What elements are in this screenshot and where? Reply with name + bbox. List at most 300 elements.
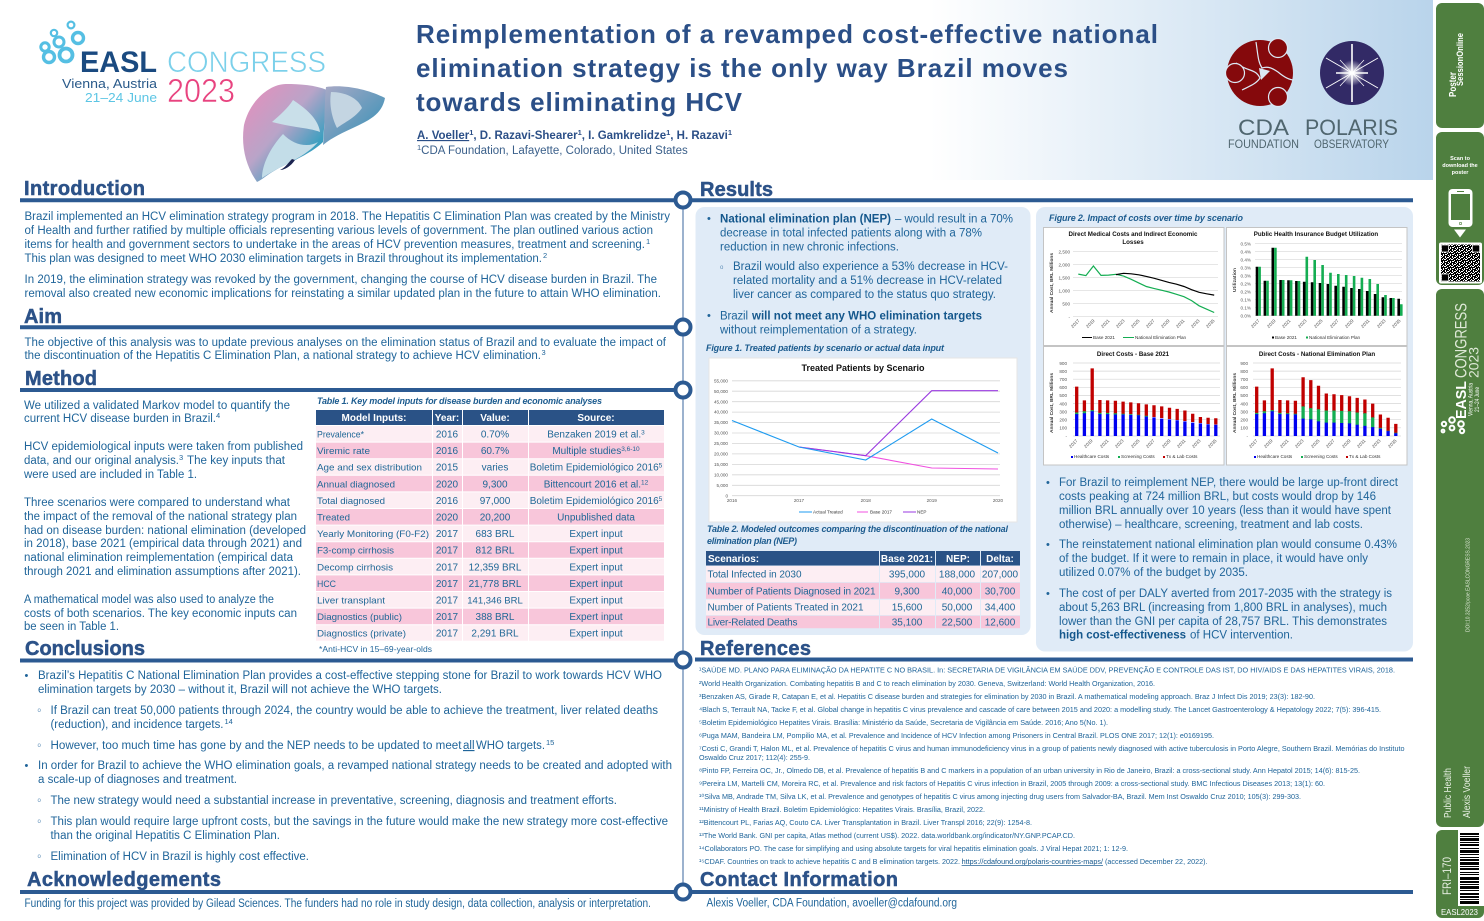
table 2: modeled outcomes: NEP: — [946, 554, 970, 565]
table 1 column: source: Unpublished data — [557, 512, 635, 524]
sidebar panel: EASL congress, topic, author: DOI:10.3252/pcoe.EASLCONGRESS.2023 — [1466, 538, 1472, 632]
chart: public health insurance budget utilization: 0.4% — [1241, 249, 1251, 254]
table 2 caption — [707, 524, 1008, 546]
chart: direct costs national elimination plan: 600 — [1240, 385, 1248, 390]
chart: direct costs base 2021: 300 — [1059, 409, 1067, 414]
line: NEP — [799, 391, 998, 456]
chart: direct costs base 2021: 500 — [1059, 393, 1067, 398]
figure 1 axis labels: 40,000 — [714, 410, 728, 415]
chart: direct costs national elimination plan: Tx & Lab Costs — [1349, 454, 1381, 459]
table 2: modeled outcomes: Total Infected in 2030 — [708, 570, 802, 580]
chart: direct costs national elimination plan: Healthcare Costs — [1257, 454, 1293, 459]
chart: direct costs base 2021: Healthcare Costs — [1074, 454, 1110, 459]
figure 1 x labels: 2017 — [794, 498, 805, 503]
authors and affiliation: A. Voeller — [417, 130, 470, 142]
text: method description — [23, 400, 306, 633]
chart: direct costs base 2021: 2035 — [1207, 438, 1218, 449]
results bullets: o — [720, 265, 724, 271]
figure 1 axis labels: 15,000 — [714, 462, 728, 467]
text: references list: (accessed December 22, 2022). — [1105, 859, 1208, 866]
chart: direct costs base 2021: 2029 — [1161, 438, 1172, 449]
text: method description: data, and our original analysis. — [24, 455, 179, 467]
results bullets lower right — [1046, 477, 1399, 642]
table 1 column: model inputs: Prevalence* — [317, 430, 364, 440]
figure 1 legend: Actual Treated — [813, 510, 843, 515]
title: towards eliminating HCV — [416, 87, 743, 117]
chart: public health insurance budget utilization: Public Health Insurance Budget Utilization — [1254, 231, 1378, 238]
table 1 header row: Model Inputs: — [342, 413, 406, 424]
table 1 column: source: Bittencourt 2016 et al. — [544, 479, 641, 490]
text: method description: through 2021 and elimination assumptions after 2021). — [24, 566, 301, 578]
table 1 column: model inputs: Diagnostics (public) — [317, 612, 402, 623]
table 1 column: model inputs: F3-comp cirrhosis — [317, 546, 394, 557]
table 1 column: year: 2020 — [436, 479, 459, 490]
chart: direct medical costs and indirect economic losses: 2029 — [1160, 318, 1171, 329]
figure 1 x labels: 2020 — [993, 498, 1004, 503]
sidebar panel: EASL congress, topic, author — [1436, 289, 1484, 827]
chart: direct costs national elimination plan: 2033 — [1371, 438, 1382, 449]
table 1 column: value: 20,200 — [480, 512, 511, 524]
chart: direct costs base 2021: 2025 — [1130, 438, 1141, 449]
chart: public health insurance budget utilization: 2021 — [1281, 318, 1292, 329]
table 2: modeled outcomes: Liver-Related Deaths — [708, 618, 798, 628]
results bullets lower right: costs peaking at 724 million BRL, but costs would drop by 146 — [1059, 491, 1376, 503]
figure 1 axis labels: 45,000 — [714, 399, 728, 404]
chart: direct costs national elimination plan: 2019 — [1263, 438, 1274, 449]
table 1 column: model inputs: Liver transplant — [317, 596, 385, 606]
table 1 column: value: 0.70% — [481, 430, 509, 440]
table 1 column: value: 21,778 BRL — [469, 579, 522, 590]
panel: results right — [1036, 207, 1413, 652]
header background band — [0, 0, 1433, 180]
table 1: key model inputs — [316, 396, 664, 654]
text: conclusions bullets: In order for Brazil to achieve the WHO elimination goals, a revamped national strategy needs to be created and adopted with — [38, 760, 672, 772]
text: method description: A mathematical model was also used to analyze the — [24, 594, 274, 606]
results bullets: • — [707, 310, 711, 322]
bars: tx and lab costs — [1257, 368, 1396, 433]
chart: direct costs national elimination plan: 800 — [1240, 369, 1248, 374]
chart: direct medical costs and indirect economic losses: Annual Cost, BRL Millions — [1049, 253, 1055, 313]
sidebar panel: scan to download: Scan to — [1450, 156, 1471, 162]
chart: direct medical costs and indirect economic losses: 1,500 — [1058, 275, 1070, 280]
table 1 footnote: *Anti-HCV in 15–69-year-olds — [319, 644, 432, 654]
chart: direct costs national elimination plan: 200 — [1240, 418, 1248, 422]
results bullets lower right: The reinstatement national elimination plan would consume 0.43% — [1059, 539, 1397, 551]
table 1 column: model inputs: Yearly Monitoring (F0-F2) — [317, 529, 429, 540]
table 1 column: model inputs: Total diagnosed — [317, 496, 385, 507]
heading: Acknowledgements: Acknowledgements — [27, 869, 221, 891]
figure 1 legend — [799, 510, 926, 515]
barcode — [1460, 833, 1479, 905]
table 1 column: source: Benzaken 2019 et al. — [547, 430, 641, 440]
text: references list: ¹¹Ministry of Health Brazil. Boletim Epidemiológico: Hepatites Virais. Brasília, Brazil, 2022. — [699, 807, 985, 814]
chart: direct costs base 2021: Screening Costs — [1121, 454, 1155, 459]
chart: direct medical costs and indirect economic losses: 1,000 — [1058, 288, 1070, 293]
table 1 column: year: 2015 — [436, 463, 459, 474]
figure 1 legend: Base 2017 — [870, 510, 892, 515]
chart: public health insurance budget utilization: 2031 — [1360, 318, 1371, 329]
text: references list: ¹⁰Silva MB, Andrade TM, Silva LK, et al. Prevalence and genotypes of hepatitis C virus among injecting drug users from Salvador-BA, Brazil. Mem Inst Oswaldo Cruz 2010; 105(3): 299-303. — [699, 793, 1301, 801]
table 1 column: source: Expert input — [569, 612, 623, 623]
table 1 column: value: 97,000 — [480, 496, 511, 507]
table 2: modeled outcomes: 15,600 — [892, 602, 923, 614]
table 1 header row: Source: — [577, 413, 615, 424]
bars: national elimination plan — [1260, 248, 1401, 316]
table 1 column: source: 3,6-10 — [621, 446, 640, 453]
text: conclusions bullets: However, too much time has gone by and the NEP needs to be updated to meet — [50, 740, 462, 752]
chart: direct costs base 2021: 2031 — [1176, 438, 1187, 449]
table 1 column: value: 60.7% — [481, 446, 509, 457]
table 1 column: value: 141,346 BRL — [467, 596, 523, 606]
text: conclusions bullets — [24, 670, 672, 863]
logo: EASL Congress 2023: 2023 — [167, 72, 235, 109]
chart: direct costs base 2021: 200 — [1059, 418, 1067, 422]
authors and affiliation — [417, 128, 732, 157]
table 1 row backgrounds — [316, 410, 664, 641]
line: actual treated — [732, 419, 998, 460]
authors and affiliation: 1 — [578, 128, 582, 137]
panel: results left — [696, 207, 1030, 635]
sidebar panel: scan to download — [1436, 132, 1484, 285]
table 1 column: source: Expert input — [569, 596, 623, 606]
figure 1: treated patients line chart — [709, 358, 1017, 522]
authors and affiliation: 1 — [666, 128, 670, 137]
chart: public health insurance budget utilization: National Elimination Plan — [1309, 335, 1361, 340]
authors and affiliation: , H. Razavi — [670, 130, 728, 142]
chart: public health insurance budget utilization: 0.3% — [1241, 265, 1251, 270]
authors and affiliation: CDA Foundation, Lafayette, Colorado, United States — [421, 145, 688, 157]
sidebar panel: scan to download: poster — [1452, 170, 1469, 176]
table 1 column: year: 2016 — [436, 496, 459, 507]
chart: direct costs base 2021: 2019 — [1083, 438, 1094, 449]
text: aim: the discontinuation of the Hepatitis C Elimination Plan, a national strategy to achieve HCV elimination. — [24, 350, 541, 362]
table 1 column: year: 2017 — [436, 612, 459, 623]
logo: Polaris Observatory: OBSERVATORY — [1314, 137, 1389, 151]
sidebar panel: poster number and barcode: FRI–170 — [1440, 857, 1454, 895]
text: conclusions bullets: a scale-up of diagnoses and treatment. — [38, 774, 237, 786]
table 1 column: source: 3 — [641, 430, 645, 436]
table 2: modeled outcomes: 9,300 — [894, 586, 920, 598]
text: introduction paragraphs: items for health and government sectors to undertake in the areas of HCV prevention measures, treatment and screening. — [24, 239, 645, 251]
chart: direct costs national elimination plan: Direct Costs - National Elimination Plan — [1259, 351, 1375, 358]
results bullets: without reimplementation of a strategy. — [719, 324, 917, 336]
chart: direct costs national elimination plan: 2027 — [1325, 438, 1336, 449]
heading: References: References — [700, 638, 811, 660]
figure 1 x labels: 2019 — [927, 498, 937, 503]
text: acknowledgements: Funding for this project was provided by Gilead Sciences. The funders had no role in study design, data collection, analysis or interpretation. — [24, 898, 651, 910]
table 2 caption: elimination plan (NEP) — [707, 536, 797, 546]
text: aim — [24, 337, 667, 362]
results bullets: reduction in new chronic infections. — [720, 241, 899, 253]
figure 1 axis labels: 50,000 — [714, 389, 728, 394]
figure 1 axis labels: 20,000 — [714, 452, 728, 456]
bars: screening costs — [1077, 410, 1146, 417]
chart: public health insurance budget utilization: 0.1% — [1241, 305, 1251, 310]
text: references list: ¹⁴Collaborators PO. The case for simplifying and using absolute targets for viral hepatitis elimination goals. J Viral Hepat 2021; 1: 12-9. — [699, 846, 1128, 853]
text: introduction paragraphs: removal also created new economic implications for reinstating a similar updated plan in the future to attain WHO elimination. — [24, 288, 661, 300]
logo: CDA Foundation — [1226, 38, 1299, 151]
chart: direct costs base 2021: - — [1065, 434, 1067, 439]
text: aim: 3 — [542, 348, 546, 357]
chart: direct costs national elimination plan: 2023 — [1294, 438, 1305, 449]
chart: direct costs national elimination plan: Annual Cost, BRL Millions — [1232, 373, 1238, 433]
chart: direct costs national elimination plan: 100 — [1240, 426, 1248, 431]
text: conclusions bullets: • — [24, 670, 28, 682]
results bullets: decrease in total infected patients along with a 78% — [720, 227, 982, 239]
results bullets: related mortality and a 51% decrease in HCV-related — [733, 275, 1002, 287]
table 1 column: source: Expert input — [569, 546, 623, 557]
text: conclusions bullets: (reduction), and incidence targets. — [50, 719, 224, 731]
logo: Polaris Observatory — [1305, 41, 1398, 151]
chart: direct costs national elimination plan: 2029 — [1341, 438, 1352, 449]
figure 2 caption: Figure 2. Impact of costs over time by scenario — [1049, 213, 1244, 223]
table 1 column: year: 2016 — [436, 430, 459, 440]
text: references list: ⁸Pinto FP, Ferreira OC, Jr., Olmedo DB, et al. Prevalence of hepatitis B and C markers in a population of an urban university in Rio de Janeiro, Brazil: a cross-sectional study. Ann Hepatol 2015; 14(6): 815-25. — [699, 768, 1360, 775]
chart: direct costs national elimination plan: 900 — [1240, 361, 1248, 366]
authors and affiliation: , D. Razavi-Shearer — [473, 130, 578, 142]
text: method description: HCV epidemiological inputs were taken from published — [24, 441, 303, 453]
bars: tx and lab costs — [1077, 368, 1216, 424]
sidebar panel: poster session online: SessionOnline — [1455, 33, 1466, 86]
results bullets: – would result in a 70% — [895, 213, 1013, 225]
chart: direct medical costs and indirect economic losses: 2033 — [1190, 318, 1201, 329]
text: aim: The objective of this analysis was to update previous analyses on the elimination status of Brazil and to evaluate the impact of — [24, 337, 667, 349]
results bullets: National elimination plan (NEP) — [720, 213, 891, 225]
chart: direct medical costs and indirect economic losses: 2027 — [1145, 318, 1156, 329]
text: introduction paragraphs: Brazil implemented an HCV elimination strategy program in 2018. The Hepatitis C Elimination Plan was created by the Ministry — [24, 211, 670, 223]
authors and affiliation: 1 — [728, 128, 732, 137]
sidebar panel: EASL congress, topic, author: 2023 — [1466, 347, 1482, 378]
chart: direct medical costs and indirect economic losses: Losses — [1122, 239, 1144, 246]
text: conclusions bullets: o — [38, 798, 42, 804]
chart: direct medical costs and indirect economic losses: 2,500 — [1058, 249, 1070, 254]
heading: Conclusions: Conclusions — [25, 638, 145, 660]
table 1 column: model inputs: Viremic rate — [317, 446, 370, 457]
table 1 column: value: varies — [482, 463, 508, 474]
text: references list: ⁹Pereira LM, Martelli CM, Moreira RC, et al. Prevalence and risk factors of Hepatitis C virus infection in Brazil, 2005 through 2009: a cross-sectional study. BMC Infectious Diseases 2013; 13(1): 60. — [699, 781, 1325, 788]
chart: public health insurance budget utilization: 2027 — [1329, 318, 1340, 329]
table 1 column: source: Expert input — [569, 529, 623, 540]
results bullets: Brazil — [720, 310, 748, 322]
figure 1 x labels — [727, 498, 1004, 503]
chart: direct costs national elimination plan: Screening Costs — [1304, 454, 1338, 459]
chart: public health insurance budget utilization: 0.2% — [1241, 289, 1251, 294]
chart: direct costs base 2021: 2033 — [1191, 438, 1202, 449]
chart: direct costs base 2021: 900 — [1059, 361, 1067, 366]
text: conclusions bullets: Brazil’s Hepatitis C National Elimination Plan provides a cost-effective stepping stone for Brazil to work towards HCV WHO — [38, 670, 662, 682]
results bullets lower right: high cost-effectiveness — [1059, 630, 1186, 642]
title — [416, 19, 1158, 117]
chart: direct medical costs and indirect economic losses: 2023 — [1115, 318, 1126, 329]
results bullets lower right: of HCV intervention. — [1190, 630, 1293, 642]
logo: CDA Foundation: FOUNDATION — [1228, 137, 1299, 151]
text: conclusions bullets: elimination targets by 2030 – without it, Brazil will not achieve the WHO targets. — [38, 684, 442, 696]
text: conclusions bullets: 15 — [546, 738, 554, 747]
chart: direct costs national elimination plan — [1226, 346, 1407, 465]
sidebar panel: EASL congress, topic, author: EASL — [1453, 381, 1470, 419]
chart: public health insurance budget utilization: 0.3% — [1241, 273, 1251, 278]
text: method description: We utilized a validated Markov model to quantify the — [24, 400, 290, 412]
table 1 column: source: Expert input — [569, 629, 623, 640]
results bullets: Brazil would also experience a 53% decrease in HCV- — [733, 261, 1008, 273]
chart: direct medical costs and indirect economic losses: National Elimination Plan — [1135, 335, 1187, 340]
results bullets — [707, 213, 1013, 336]
figure 1 axis labels — [714, 378, 728, 498]
table 1 column: model inputs: Annual diagnosed — [317, 479, 395, 490]
sidebar panel: EASL congress, topic, author: CONGRESS — [1452, 303, 1470, 378]
chart: direct costs national elimination plan: 2025 — [1310, 438, 1321, 449]
text: references list: ⁶Puga MAM, Bandeira LM, Pompilio MA, et al. Prevalence and Incidence of HCV Infection among Prisoners in Central Brazil. PLOS ONE 2017; 12(1): e0169195. — [699, 733, 1214, 740]
table 2: modeled outcomes — [706, 551, 1020, 628]
logo: EASL Congress 2023 — [41, 22, 385, 182]
text: references list: ¹³The World Bank. GNI per capita, Atlas method (current US$). 2022. data.worldbank.org/indicator/NY.GNP.PCAP.CD. — [699, 833, 1075, 840]
table 1 column: model inputs: Age and sex distribution — [317, 463, 422, 474]
chart: public health insurance budget utilization: 0.0% — [1241, 313, 1251, 318]
chart: direct costs national elimination plan: 2031 — [1356, 438, 1367, 449]
bars: base 2021 — [1257, 248, 1399, 316]
title: Reimplementation of a revamped cost-effective national — [416, 19, 1158, 49]
text: conclusions bullets: 14 — [224, 717, 233, 726]
table 1 column: value: 12,359 BRL — [469, 562, 522, 573]
heading: Method: Method — [25, 368, 97, 390]
table 1 column: year: 2017 — [436, 579, 459, 590]
chart: public health insurance budget utilization — [1226, 228, 1407, 346]
table 1 column: year: 2017 — [436, 562, 459, 573]
table 2: modeled outcomes: 22,500 — [942, 618, 973, 628]
chart: direct medical costs and indirect economic losses: 2019 — [1085, 318, 1096, 329]
table 1 header row: Year: — [435, 413, 459, 424]
heading: Results: Results — [700, 179, 773, 201]
text: conclusions bullets: Elimination of HCV in Brazil is highly cost effective. — [50, 851, 309, 863]
table 1 header row — [342, 413, 615, 424]
line: national elimination plan — [1078, 266, 1214, 312]
table 1 header row: Value: — [480, 413, 510, 424]
chart: public health insurance budget utilization: 0.4% — [1241, 257, 1251, 262]
chart: public health insurance budget utilization: Base 2021 — [1275, 335, 1297, 340]
timeline connector — [20, 192, 1413, 900]
text: references list: ⁵Boletim Epidemiológico Hepatites Virais. Brasília: Ministério da Saúde, Secretaria de Vigilância em Saúde. 2016; Ano 5(No. 1). — [699, 720, 1108, 727]
icon: arrow down — [1454, 230, 1466, 238]
table 1 column: year: 2017 — [436, 596, 459, 606]
chart: direct costs base 2021: 600 — [1059, 385, 1067, 390]
chart: direct costs base 2021: Annual Cost, BRL Millions — [1049, 373, 1055, 433]
table 1 column: source: Boletim Epidemiológico 2016 — [530, 463, 659, 474]
logo: EASL Congress 2023: Vienna, Austria — [62, 76, 158, 91]
table 2 caption: Table 2. Modeled outcomes comparing the discontinuation of the national — [707, 524, 1008, 534]
text: method description: had on disease burden: national elimination (developed — [24, 525, 306, 537]
chart: direct costs national elimination plan: 2017 — [1248, 438, 1259, 449]
results bullets: liver cancer as compared to the status quo strategy. — [733, 289, 996, 301]
chart: direct medical costs and indirect economic losses: Base 2021 — [1093, 335, 1115, 340]
sidebar panel: EASL congress, topic, author: Vienna, Austria — [1468, 383, 1474, 416]
table 1 column: source: Expert input — [569, 579, 623, 590]
icon: hexagon cluster — [41, 22, 84, 63]
figure 1 axis labels: 35,000 — [714, 420, 728, 425]
heading: Introduction: Introduction — [24, 178, 145, 200]
figure 1 legend: NEP — [917, 510, 926, 515]
chart: direct costs national elimination plan: 2035 — [1387, 438, 1398, 449]
figure 1 caption: Figure 1. Treated patients by scenario or actual data input — [706, 343, 945, 353]
heading: Aim: Aim — [24, 306, 62, 328]
table 1 column: value: 812 BRL — [476, 546, 515, 557]
sidebar panel: poster number and barcode: EASL2023 — [1441, 907, 1478, 917]
sidebar panel: poster number and barcode — [1436, 830, 1484, 918]
table 1: key model inputs: Table 1. Key model inputs for disease burden and economic analyses — [317, 396, 602, 406]
table 1 column: year: 2016 — [436, 446, 459, 457]
text: introduction paragraphs — [24, 211, 670, 300]
table 2: modeled outcomes: 35,100 — [892, 618, 923, 628]
chart: direct costs base 2021: Tx & Lab Costs — [1166, 454, 1198, 459]
text: method description: costs of both scenarios. The key economic inputs can — [24, 608, 297, 620]
text: introduction paragraphs: This plan was designed to meet WHO 2030 elimination targets in Brazil throughout its implementation. — [24, 253, 542, 265]
chart: public health insurance budget utilization: 2023 — [1297, 318, 1308, 329]
table 1 column: year — [436, 430, 459, 640]
text: conclusions bullets: than the original Hepatitis C Elimination Plan. — [50, 830, 280, 842]
chart: direct costs base 2021 — [1044, 346, 1224, 465]
sidebar panel: EASL congress, topic, author: 21–24 June — [1474, 387, 1481, 412]
text: references list: https://cdafound.org/polaris-countries-maps/ — [962, 859, 1103, 866]
text: references list: ⁴Blach S, Terrault NA, Tacke F, et al. Global change in hepatitis C virus prevalence and cascade of care between 2015 and 2020: a modelling study. The Lancet Gastroenterology & Hepatology 2022; 7(5): 396-415. — [699, 707, 1381, 714]
table 2: modeled outcomes: Delta: — [986, 554, 1014, 565]
text: method description: national elimination reimplementation (empirical data — [24, 552, 294, 564]
table 2: modeled outcomes: Base 2021: — [881, 554, 933, 565]
chart: direct costs base 2021: 2021 — [1099, 438, 1110, 449]
figure 1 axis labels: 30,000 — [714, 431, 728, 436]
table 1 column: model inputs: Treated — [317, 512, 350, 524]
figure 1 x labels: 2018 — [861, 498, 871, 503]
text: method description: be seen in Table 1. — [24, 621, 119, 633]
authors and affiliation: , I. Gamkrelidze — [582, 130, 666, 142]
text: method description: The key inputs that — [187, 455, 286, 467]
figure 1 x labels: 2016 — [727, 498, 738, 503]
icon: QR code — [1439, 242, 1482, 284]
bars: screening costs — [1257, 406, 1396, 434]
authors and affiliation: 1 — [469, 128, 473, 137]
figure 1 axis labels: 5,000 — [716, 483, 728, 488]
table 1 column: value: 9,300 — [482, 479, 508, 490]
bars: healthcare costs — [1077, 411, 1216, 436]
chart: direct medical costs and indirect economic losses: 2035 — [1205, 318, 1216, 329]
results bullets lower right: otherwise) – healthcare, screening, treatment and lab costs. — [1059, 519, 1363, 531]
chart: public health insurance budget utilization: 2029 — [1344, 318, 1355, 329]
chart: direct medical costs and indirect economic losses: - — [1068, 314, 1070, 319]
chart: direct medical costs and indirect economic losses: 2,000 — [1058, 262, 1070, 267]
text: conclusions bullets: all — [463, 740, 475, 752]
chart: public health insurance budget utilization: 0.1% — [1241, 297, 1251, 302]
chart: direct medical costs and indirect economic losses — [1044, 228, 1224, 346]
text: conclusions bullets: o — [38, 743, 42, 749]
text: introduction paragraphs: In 2019, the elimination strategy was revoked by the government, changing the course of HCV disease burden in Brazil. The — [24, 274, 657, 286]
icon: liver — [243, 84, 385, 182]
text: conclusions bullets: WHO targets. — [476, 740, 545, 752]
results bullets: will not meet any WHO elimination targets — [751, 310, 982, 322]
text: conclusions bullets: The new strategy would need a substantial increase in preventative, screening, diagnosis and treatment efforts. — [50, 795, 617, 807]
sidebar panel: EASL congress, topic, author: Public Health — [1442, 768, 1454, 818]
chart: direct costs base 2021: 100 — [1059, 426, 1067, 431]
text: references list: ¹SAÚDE MD. PLANO PARA ELIMINAÇÃO DA HEPATITE C NO BRASIL. In: SECRETARIA DE VIGILÂNCIA EM SAÚDE DDV, PREVENÇÃO E CONTROLE DAS IST, DO HIV/AIDS E DAS HEPATITES VIRAIS, 2018. — [699, 666, 1395, 674]
text: conclusions bullets: o — [38, 708, 42, 714]
text: method description: Three scenarios were compared to understand what — [24, 497, 291, 509]
table 1 column: value: 388 BRL — [476, 612, 515, 623]
results bullets lower right: million BRL annually over 10 years (less than it would have spent — [1059, 505, 1392, 517]
text: method description: were used are included in Table 1. — [23, 469, 197, 481]
results bullets lower right: utilized 0.07% of the budget by 2035. — [1059, 567, 1248, 579]
text: contact details: Alexis Voeller, CDA Foundation, avoeller@cdafound.org — [706, 898, 957, 910]
table 1 column: year: 2017 — [436, 546, 459, 557]
text: method description: the impact of the removal of the national strategy plan — [24, 511, 297, 523]
table 2: modeled outcomes: Number of Patients Diagnosed in 2021 — [708, 586, 876, 598]
text: method description: 3 — [179, 453, 183, 462]
